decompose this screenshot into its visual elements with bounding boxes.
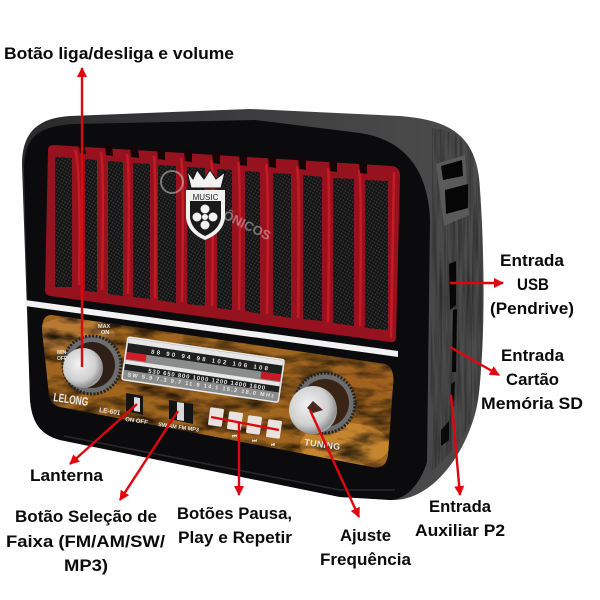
volume scale labels: ON [101, 330, 109, 336]
tuning display: SW 5.9 7.3 9.7 11.9 14.1 15.2 18.0 MHz [127, 372, 275, 400]
label: USB [490, 251, 574, 318]
label: P2: Entrada [429, 497, 492, 516]
side port: SD card [452, 309, 457, 372]
label: band selector: MP3) [64, 556, 108, 575]
arrow: tuning [310, 410, 359, 517]
radio body: top and side casing [22, 109, 484, 500]
speaker mesh slots [55, 157, 388, 330]
playback buttons: ⏯ [271, 442, 275, 448]
tuning display: 88 90 94 98 102 106 108 [151, 350, 269, 373]
crest label: MUSIC [193, 193, 219, 202]
watermark [161, 171, 274, 243]
band switch [158, 400, 199, 434]
tuning display [122, 337, 284, 402]
lantern switch: ON OFF [125, 417, 148, 426]
clover [192, 204, 218, 230]
label: frequency [320, 526, 412, 569]
label: SD card: Cartão [506, 370, 559, 389]
label: USB: USB [517, 275, 549, 294]
label: P2: Auxiliar P2 [415, 521, 505, 540]
side port: P2 [451, 381, 455, 408]
label: playback buttons: Play e Repetir [178, 528, 292, 547]
label: P2 [415, 497, 505, 540]
playback buttons: ⏮ [232, 434, 237, 440]
model label: LE-601 [99, 407, 121, 417]
label: band selector: Faixa (FM/AM/SW/ [6, 532, 165, 551]
volume scale labels: OFF [57, 356, 67, 362]
playback buttons [208, 407, 282, 448]
playback buttons: ⏭ [252, 438, 257, 444]
volume scale labels: MAX [98, 324, 111, 330]
label: band selector: Botão Seleção de [15, 507, 157, 526]
radio [22, 109, 484, 500]
arrow: band selector [120, 411, 178, 500]
arrow: power/volume [81, 68, 83, 367]
side port: lower [441, 421, 449, 446]
side vents [436, 155, 469, 226]
label: band selector [6, 507, 165, 575]
label: playback buttons [177, 504, 292, 547]
front black frame [24, 120, 430, 500]
shield [186, 190, 225, 240]
red grille [45, 143, 400, 342]
brand logo: LELONG [53, 390, 89, 409]
tuning knob [289, 373, 355, 434]
arrow: lantern [70, 404, 137, 464]
arrow: USB [450, 282, 503, 284]
label: SD card: Entrada [501, 346, 565, 365]
watermark: ÔNICOS [221, 207, 274, 243]
volume knob [63, 336, 121, 394]
label: frequency: Ajuste [340, 526, 391, 545]
label: SD card [481, 346, 583, 413]
label: playback buttons: Botões Pausa, [177, 504, 292, 523]
volume scale labels [57, 324, 111, 362]
white trim bar [25, 300, 398, 357]
label: USB: Entrada [500, 251, 565, 270]
lower ledge line [64, 436, 395, 490]
badge: music crest [186, 170, 225, 240]
arrow: P2 [451, 395, 460, 495]
band switch: SW AM FM MP3 [158, 422, 199, 434]
label: frequency: Frequência [320, 550, 412, 569]
tuning label: TUNING [304, 437, 341, 452]
side wood-grain texture [430, 128, 484, 472]
tuning display: 530 650 800 1000 1200 1400 1600 [148, 369, 266, 392]
label: power and volume: Botão liga/desliga e volume [4, 44, 234, 63]
shadows at louver tops [78, 143, 367, 174]
arrow: SD card [450, 347, 499, 375]
volume scale labels: MIN [57, 350, 67, 356]
label: SD card: Memória SD [481, 394, 583, 413]
lantern switch [125, 393, 148, 426]
arrow: playback buttons [211, 417, 279, 495]
label: USB: (Pendrive) [490, 299, 574, 318]
side port: USB [449, 261, 456, 310]
label: lantern: Lanterna [30, 466, 104, 485]
crown [187, 170, 225, 188]
wood control panel [42, 315, 394, 468]
louver highlights [75, 150, 394, 338]
